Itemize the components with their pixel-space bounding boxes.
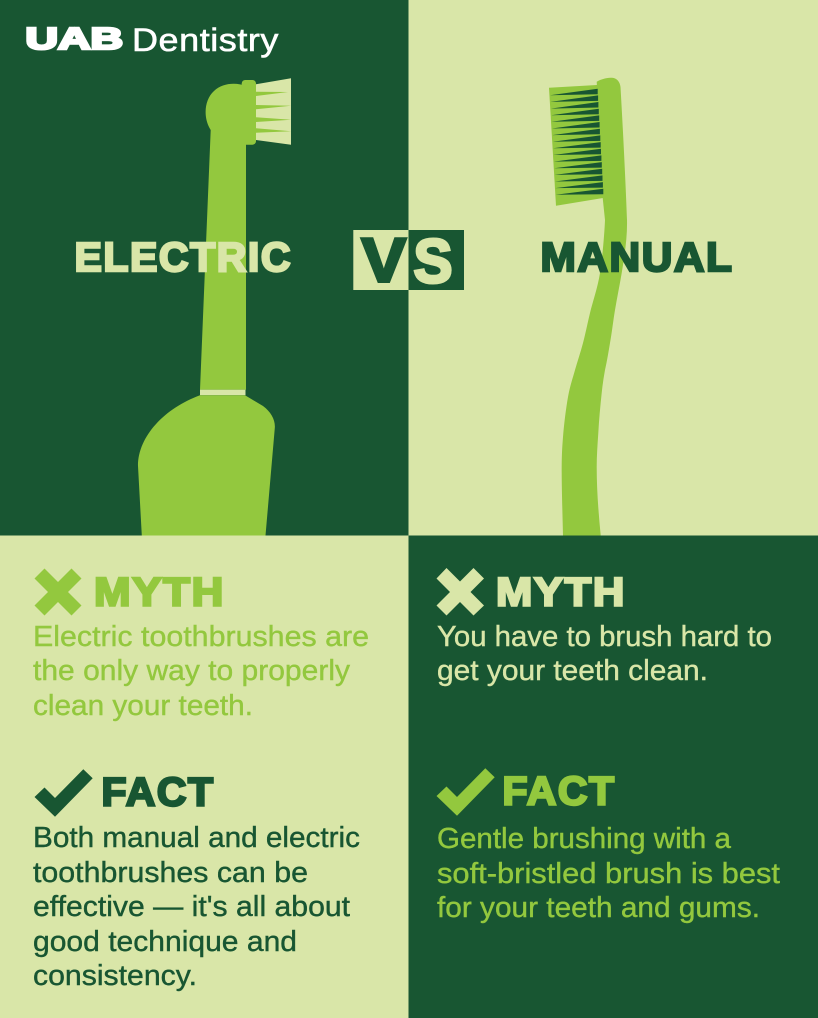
logo: UAB Dentistry: Dentistry [132, 22, 279, 58]
text: electric myth statement: clean your teeth. [33, 690, 253, 722]
text: electric myth statement [33, 621, 369, 722]
text: electric fact statement: toothbrushes can be [33, 857, 308, 889]
heading: ELECTRIC: ELECTRIC [74, 234, 292, 280]
icon: manual toothbrush [549, 78, 627, 535]
text: electric fact statement [33, 822, 360, 992]
panel: manual background [408, 0, 818, 536]
text: electric myth statement: Electric toothbrushes are [33, 621, 369, 653]
badge: VS: V [362, 226, 406, 296]
text: manual myth statement: get your teeth clean. [437, 655, 708, 687]
badge: VS [353, 226, 464, 296]
text: electric fact statement: Both manual and electric [33, 822, 360, 854]
logo: UAB Dentistry: UAB [26, 21, 123, 56]
icon: X mark [34, 568, 82, 616]
icon: check mark [34, 769, 93, 817]
icon: X mark [436, 568, 484, 616]
section: electric fact [33, 769, 360, 992]
text: manual fact statement: soft-bristled brush is best [437, 858, 780, 890]
panel: manual facts background [408, 536, 818, 1018]
heading: MANUAL: MANUAL [540, 234, 734, 280]
text: manual myth statement [437, 621, 772, 687]
text: manual fact statement: for your teeth and gums. [437, 892, 760, 924]
text: electric fact statement: consistency. [33, 960, 197, 992]
section: manual myth [436, 568, 772, 687]
panel: electric facts background [0, 536, 408, 1018]
panel: electric background [0, 0, 408, 536]
text: manual fact statement [437, 823, 780, 924]
label: FACT: FACT [502, 770, 616, 814]
section: electric myth [33, 568, 369, 722]
logo: UAB Dentistry [26, 21, 279, 58]
label: MYTH: MYTH [496, 570, 626, 614]
section: manual fact [436, 768, 780, 924]
text: electric myth statement: the only way to properly [33, 655, 351, 687]
text: electric fact statement: good technique and [33, 926, 297, 958]
text: electric fact statement: effective — it's all about [33, 891, 350, 923]
text: manual myth statement: You have to brush hard to [437, 621, 772, 653]
icon: electric toothbrush [138, 78, 291, 536]
icon: check mark [436, 768, 495, 816]
label: MYTH: MYTH [94, 570, 225, 614]
label: FACT: FACT [102, 770, 214, 814]
text: manual fact statement: Gentle brushing with a [437, 823, 732, 855]
badge: VS: S [414, 228, 452, 296]
